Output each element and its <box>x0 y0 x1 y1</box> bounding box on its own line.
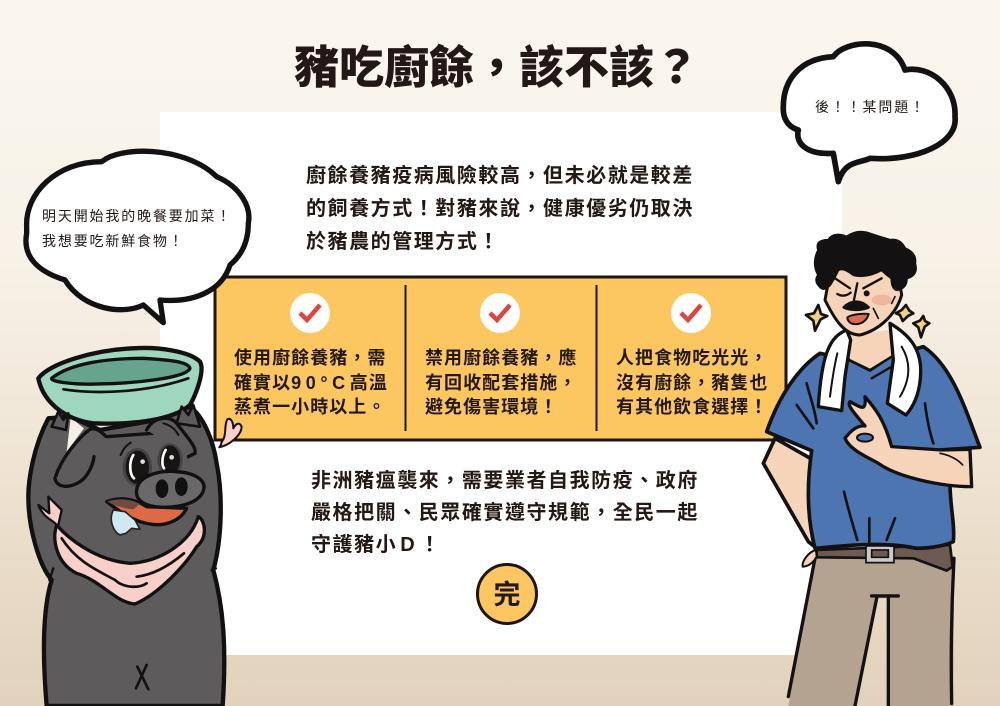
farmer head <box>815 232 916 335</box>
sparkles <box>806 305 929 337</box>
pig mouth <box>107 499 187 525</box>
white content panel <box>160 112 842 655</box>
item 2 text: 有回收配套措施， <box>425 373 577 393</box>
farmer bubble text: 後！！某問題！ <box>815 99 926 115</box>
item 3 text: 人把食物吃光光， <box>616 347 768 368</box>
item 3 text: 沒有廚餘，豬隻也 <box>616 372 768 393</box>
intro text <box>306 163 694 253</box>
item 1 text: 確實以90°C高溫 <box>234 372 388 393</box>
farmer face <box>835 278 882 303</box>
speech bubble: farmer <box>783 44 955 182</box>
yellow checklist panel <box>215 277 786 440</box>
item 3: no leftovers <box>616 293 768 417</box>
item 1 text: 使用廚餘養豬，需 <box>234 347 386 368</box>
item 3 text <box>616 347 768 417</box>
item 2: recycling measures <box>425 293 577 417</box>
farmer neck <box>850 330 892 370</box>
end badge: 完 <box>494 580 520 610</box>
end badge <box>478 564 536 624</box>
item 1: cooking requirement <box>234 293 388 417</box>
food bowl <box>38 348 202 430</box>
pig fingers <box>52 412 68 430</box>
farmer shirt <box>767 347 980 548</box>
farmer hair <box>815 232 916 290</box>
icon: check mark 1 <box>290 293 330 333</box>
pig eyes <box>123 443 183 487</box>
item 2 text <box>425 347 577 417</box>
pig belly button <box>136 665 148 689</box>
closing text: 非洲豬瘟襲來，需要業者自我防疫、政府 <box>311 468 699 492</box>
pig bubble text: 明天開始我的晚餐要加菜！ <box>42 208 232 224</box>
pig scarf <box>55 517 204 604</box>
title: 豬吃廚餘，該不該？ <box>294 42 699 93</box>
pig waving hand <box>219 419 242 447</box>
icon: check mark 3 <box>671 293 711 333</box>
item 2 text: 避免傷害環境！ <box>425 396 558 417</box>
farmer towel <box>818 323 921 415</box>
pig drool <box>111 510 140 535</box>
closing text <box>311 468 699 556</box>
item 1 text: 蒸煮一小時以上。 <box>234 397 386 417</box>
closing text: 守護豬小D！ <box>311 533 441 556</box>
illustration: farmer <box>763 232 980 706</box>
farmer left arm <box>763 438 817 548</box>
farmer right arm <box>845 397 972 487</box>
item 1 text <box>234 347 388 417</box>
pig snout <box>136 471 204 507</box>
intro text: 於豬農的管理方式！ <box>306 229 500 253</box>
farmer trousers <box>788 557 954 706</box>
item 3 text: 有其他飲食選擇！ <box>616 396 768 417</box>
pig bubble text <box>42 208 232 249</box>
pig body <box>28 407 224 706</box>
icon: check mark 2 <box>480 293 520 333</box>
intro text: 廚餘養豬疫病風險較高，但未必就是較差 <box>306 163 694 187</box>
closing text: 嚴格把關、民眾確實遵守規範，全民一起 <box>311 500 699 524</box>
pig head <box>63 430 200 562</box>
farmer belt <box>803 545 953 571</box>
illustration: pig holding bowl <box>28 348 242 706</box>
shirt folds <box>797 383 933 542</box>
intro text: 的飼養方式！對豬來說，健康優劣仍取決 <box>306 196 694 220</box>
item 2 text: 禁用廚餘養豬，應 <box>425 347 577 368</box>
speech bubble: pig <box>26 151 249 323</box>
pig bubble text: 我想要吃新鮮食物！ <box>42 233 185 249</box>
